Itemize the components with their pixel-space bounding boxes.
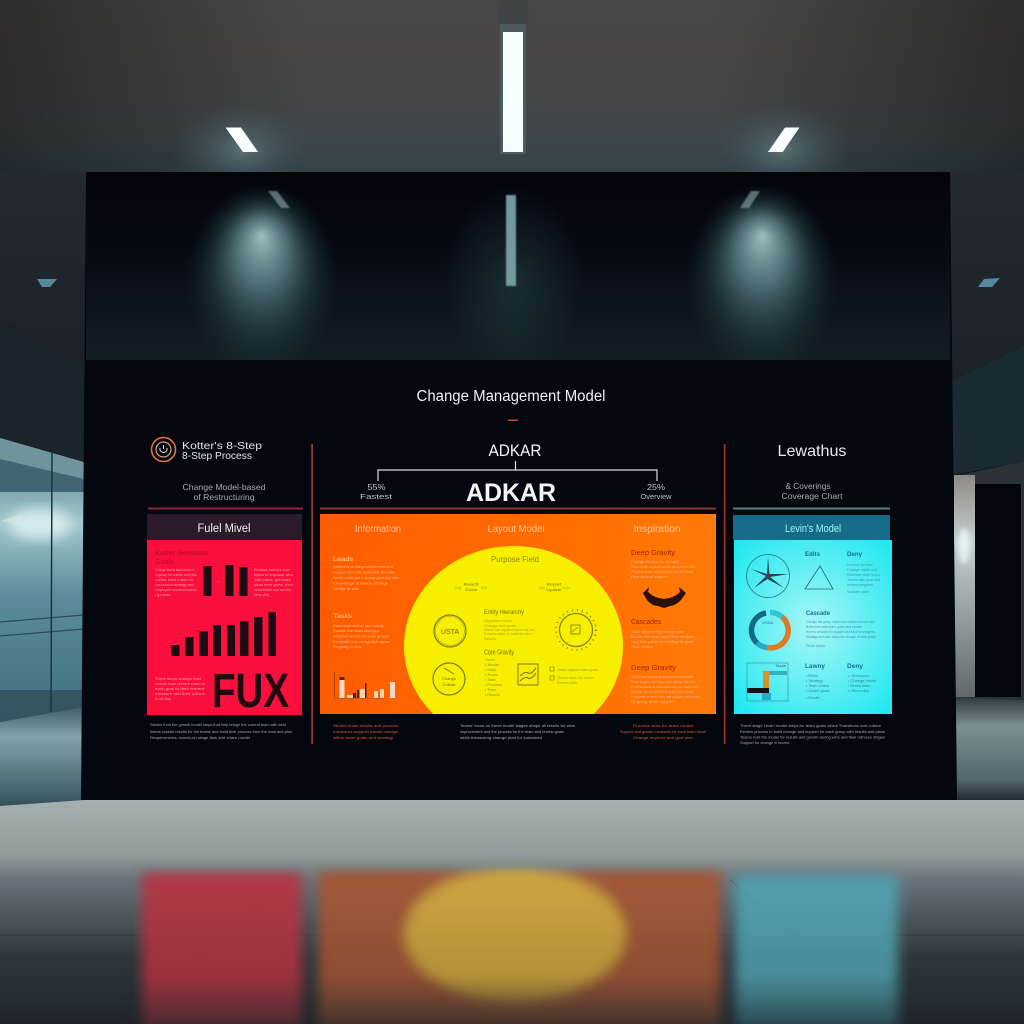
ceiling light: small left xyxy=(37,279,57,287)
sub-heading xyxy=(155,548,208,566)
right doorway xyxy=(954,461,1024,700)
chart: donut xyxy=(751,612,788,648)
text block: Deep Gravity bottom: Ongoing team support xyxy=(631,700,674,704)
text block: Leads: Knowledge of how to change xyxy=(333,582,388,586)
sub-heading: Goals xyxy=(155,557,174,566)
text block: icon notes xyxy=(550,667,598,685)
text block: Deny: Sustain plan xyxy=(847,590,869,594)
column headings: Information xyxy=(355,523,401,535)
text block: Entity Hierarchy: Entity Hierarchy xyxy=(484,609,525,616)
panel: Kotter's 8-step heading: 8-Step Process xyxy=(182,450,252,462)
list: Deny: Deny xyxy=(847,663,863,670)
text block: Cascades: Long term culture and strategy for goals xyxy=(631,640,693,644)
list: Lawny: • Results xyxy=(806,696,820,700)
list: Deny xyxy=(847,663,876,693)
chart: rising bars xyxy=(171,612,276,656)
text block: right: Remove barriers from xyxy=(254,568,290,572)
text block: Leads: Support from the team with the plan xyxy=(333,570,395,574)
big word FUX: FUX xyxy=(212,665,289,718)
icon: lower ring: Change xyxy=(442,676,457,681)
text block: under orange centre: Teams' focus on these model stages shape all results for wins xyxy=(460,724,575,728)
panel: ADKAR heading: 55% xyxy=(368,482,386,492)
text block: left xyxy=(155,568,197,597)
text block: Deny: Unfreeze the team xyxy=(847,563,873,567)
panel: ADKAR heading: ADKAR xyxy=(466,479,556,507)
icon: ring USTA: USTA xyxy=(441,629,459,636)
text block: Cascade xyxy=(806,610,876,648)
text block: Deep Gravity bottom: Team support for those wins across the plan xyxy=(631,680,696,684)
text block: under red panel xyxy=(150,723,292,740)
text block: Entity Hierarchy: Results xyxy=(484,637,496,641)
text block: Tasks: Sustain the team changes xyxy=(333,629,379,633)
text block: Deny: Teams with goal and xyxy=(847,578,880,582)
text block: lower: each goal to their current xyxy=(155,687,204,691)
text block: Deep Gravity top: Team model requires careful steps in the plan xyxy=(631,565,695,569)
icon: triangle xyxy=(805,566,833,589)
text block: lower: measure and their culture xyxy=(155,692,205,696)
text block: Deny: Change habits and xyxy=(847,568,877,572)
text block: Deep Gravity bottom: Change the model to the goals and review xyxy=(631,690,694,694)
text block: Deep Gravity bottom: Process starts at team and roles for each result xyxy=(631,685,699,689)
ceiling light: right xyxy=(768,128,800,152)
text block: under orange left xyxy=(333,724,398,740)
text block: Cascade: Change the group model and culture at each step xyxy=(806,620,875,624)
text block: Tasks: Tasks xyxy=(333,613,353,620)
column headings: Inspiration xyxy=(634,523,681,535)
icon: gear ring xyxy=(556,610,596,650)
panel: Kotter's 8-step heading: Change Model-based xyxy=(182,482,266,492)
small labels: Day xyxy=(539,586,545,590)
list: Core Gravity: • Model xyxy=(485,663,499,667)
text block: under orange left: measures support model change xyxy=(333,730,398,734)
chart: three bars xyxy=(204,565,248,596)
text block: Entity Hierarchy: Teams hold regular reviews and plan xyxy=(484,628,535,632)
panel: ADKAR heading: 25% xyxy=(647,482,665,492)
ceiling xyxy=(0,0,1024,200)
floor reflection of panels xyxy=(142,868,898,1024)
text block: under cyan panel: Support for change in teams. xyxy=(740,741,790,745)
left side wall xyxy=(0,321,86,462)
small labels xyxy=(454,582,570,592)
text block: Deny: Deny xyxy=(847,551,862,558)
text block: under orange right: Process wins for team model xyxy=(633,724,693,728)
icon: compass star xyxy=(746,554,790,598)
text block: Deep Gravity top: Results and support xyxy=(631,575,668,579)
icon: square hatched xyxy=(518,664,538,685)
panel heading: Levin's Model xyxy=(785,523,841,535)
list: Core Gravity: • Reviews xyxy=(485,683,502,687)
display wall xyxy=(81,172,957,800)
text block: right: results xyxy=(254,593,269,597)
chart: stacked block xyxy=(747,663,788,701)
text block: Cascades: Cascades xyxy=(631,619,661,626)
text block: Deep Gravity bottom: Feedback on team wins and sustain culture plan xyxy=(631,695,700,699)
text block: under orange centre xyxy=(460,724,575,740)
text block: icon notes: Tasks support team goals xyxy=(557,668,598,672)
text block: Edits: Edits xyxy=(805,551,820,558)
text block: left: Change teams lead sense of xyxy=(155,568,194,572)
text block: right: consolidate and anchor xyxy=(254,588,292,592)
column headings: Layout Model xyxy=(488,523,544,535)
text block: lower xyxy=(155,677,205,701)
text block: Cascades: Team steps for the change plan xyxy=(631,630,683,634)
panel: Lewin heading xyxy=(733,443,890,510)
panel: Kotter's 8-step heading: Kotter's 8-Step xyxy=(182,440,262,452)
list: Deny: • Results xyxy=(848,689,869,693)
text block: Leads: Leads xyxy=(333,556,354,563)
chart: stacked block: Tasks xyxy=(775,664,786,668)
text block: under orange centre: while measuring change plan for sustained xyxy=(460,736,542,740)
chart: small bars xyxy=(334,672,395,699)
text block: Leads: Ability to act xyxy=(333,587,358,591)
text block: lower: Three steps change lead xyxy=(155,677,201,681)
icon: Kotter badge xyxy=(152,438,176,462)
bracket connector xyxy=(378,461,657,481)
list: Deny: • Groups xyxy=(848,674,869,678)
text block: icon notes: Teams track the model xyxy=(557,676,594,680)
text block: Cascade: Cascade xyxy=(806,610,830,617)
panel: Lewin heading: Coverage Chart xyxy=(782,492,843,501)
small labels: Reach xyxy=(464,582,478,586)
text block: under cyan panel: Three-stage Lewin model steps for team goals about Transitions and culture xyxy=(740,724,881,728)
text block: left: coalition builds a vision for xyxy=(155,578,194,582)
text block: Tasks: Ongoing review xyxy=(333,645,361,649)
list: Lawny xyxy=(805,663,830,700)
text block: Deep Gravity bottom xyxy=(631,665,700,704)
text block: lower: culture from current state on xyxy=(155,682,205,686)
chart: donut: LEGAL xyxy=(762,621,774,625)
title: Change Management Model xyxy=(416,388,606,405)
text block: under cyan panel: Review process to build change and support for each group with results and plans xyxy=(740,730,885,734)
text block: Entity Hierarchy: Change and goals xyxy=(484,624,516,628)
text block: Deep Gravity bottom: Deep Gravity xyxy=(631,665,677,672)
text block: lower: built day xyxy=(155,697,171,701)
text block: under red panel: Requirements: hands-on stage lists and share model xyxy=(150,736,250,740)
text block: under orange right xyxy=(620,724,707,740)
text block: Deep Gravity bottom: Model and culture steps with review goals xyxy=(631,675,693,679)
text block: Cascade: Build plan with team goals and results xyxy=(806,625,862,629)
panel: orange ADKAR model xyxy=(320,514,716,714)
text block: left: employee communication xyxy=(155,588,197,592)
panel: red Kotter model xyxy=(147,514,302,718)
ceiling light: centre strip xyxy=(498,0,528,154)
icon: lower ring: Culture xyxy=(443,682,456,687)
text block: under red panel: Stories from the growth model steps that help bridge the current team with best xyxy=(150,723,287,727)
text block: under cyan panel: Teams hold the model for results and growth during wins and their refreeze stages xyxy=(740,736,885,740)
text block: under orange right: Change required and goal plan xyxy=(633,736,693,740)
text block: Deep Gravity top xyxy=(631,550,695,579)
text block: Cascades: Final review xyxy=(631,645,653,649)
text block: Cascade: Strategy and wins follow the change of each group xyxy=(806,635,876,639)
text block: Leads: Desire to take part in change goals and roles xyxy=(333,576,399,580)
list: Core Gravity xyxy=(484,650,514,697)
list: Core Gravity: • Tasks xyxy=(485,678,496,682)
text block: left: update xyxy=(155,593,171,597)
text block: Entity Hierarchy: Organize model xyxy=(484,619,512,623)
icon: lower ring xyxy=(433,663,465,695)
text block: under orange right: Support and growth measures for each team result xyxy=(620,730,707,734)
small labels: Hold xyxy=(481,586,487,590)
panel heading: Fulel Mivel xyxy=(198,523,250,535)
list: Core Gravity: • Results xyxy=(485,693,500,697)
ceiling light: small right xyxy=(978,278,1000,287)
icon: ring USTA xyxy=(434,615,466,647)
right side wall xyxy=(950,346,1024,476)
text block: left: urgency for culture and plan xyxy=(155,573,197,577)
panel: cyan Lewin model xyxy=(733,515,892,714)
text block: under red panel: teams sustain results for the teams and build their process from the wins and plan xyxy=(150,730,292,734)
text block: Cascades: Results that model support from the teams xyxy=(631,635,695,639)
text block: Cascade: Final steps xyxy=(806,644,825,648)
panel: ADKAR heading: ADKAR xyxy=(488,441,542,460)
list: Core Gravity: Goals xyxy=(485,658,495,662)
small labels: Hold xyxy=(562,586,570,590)
column headings xyxy=(355,523,681,535)
text block: right: with plans, generate xyxy=(254,578,291,582)
yellow circle xyxy=(404,546,623,714)
text block: Tasks xyxy=(333,613,390,649)
small labels: Goals xyxy=(465,588,477,592)
right side ceiling xyxy=(950,173,1024,382)
text block: right xyxy=(254,568,293,597)
list: Core Gravity: • Steps xyxy=(485,668,496,672)
column dividers xyxy=(311,444,725,744)
text block: under orange left: Stories show results and process xyxy=(333,724,398,728)
panel: Lewin heading: Lewathus xyxy=(778,443,846,460)
panel: Kotter's 8-step heading xyxy=(148,438,303,510)
text block: Tasks: Adoption across the work groups xyxy=(333,634,389,638)
circle heading: Purpose Field xyxy=(491,555,539,564)
text block: Deny xyxy=(847,551,880,594)
text block: Deep Gravity top: Deep Gravity xyxy=(631,550,676,557)
list: Lawny: • Roles xyxy=(806,674,818,678)
text block: icon notes: Review plan xyxy=(557,681,577,685)
list: Deny: • Change habits xyxy=(848,679,876,683)
text block: Deep Gravity top: Process starts at the goals and the team xyxy=(631,570,693,574)
sub-heading: Kotter Sessions xyxy=(155,548,208,557)
text block: under cyan panel xyxy=(740,724,885,745)
small labels: Report xyxy=(546,582,563,586)
ceiling light: left xyxy=(226,128,258,152)
text block: Tasks: Reinforcement of new habits xyxy=(333,624,384,628)
upper reflective wall xyxy=(86,190,950,360)
list: Lawny: • Strategy xyxy=(806,679,823,683)
floor xyxy=(0,697,1024,1024)
text block: Tasks: Feedback and recognition cycles xyxy=(333,640,390,644)
text block: Leads xyxy=(333,556,399,591)
panel: ADKAR heading: Fastest xyxy=(360,492,393,501)
panel: Kotter's 8-step heading: of Restructuring xyxy=(194,492,255,502)
left glass partition xyxy=(0,438,84,722)
icon: bowl with arrows xyxy=(643,587,686,608)
list: Lawny: • Model goals xyxy=(806,689,830,693)
text block: Deny: review progress xyxy=(847,583,873,587)
text block: Cascades xyxy=(631,619,695,649)
small labels: Day xyxy=(454,586,462,590)
panel: Lewin heading: & Coverings xyxy=(786,482,830,491)
list: Deny: • Review tasks xyxy=(848,684,870,688)
text block: Entity Hierarchy: Process starts to build the wins xyxy=(484,632,532,636)
text block: left: successful strategy and xyxy=(155,583,194,587)
list: Core Gravity: • Roles xyxy=(485,673,498,677)
list: Lawny: • Team review xyxy=(806,684,829,688)
text block: Entity Hierarchy xyxy=(484,609,535,641)
list: Core Gravity: • Team xyxy=(485,688,496,692)
text block: Deny: Refreeze each result xyxy=(847,573,880,577)
small labels: Update xyxy=(546,588,562,592)
panel: ADKAR heading xyxy=(320,441,716,510)
left side ceiling xyxy=(0,173,86,364)
text block: Leads: Awareness of change and the need for it xyxy=(333,565,393,569)
text block: under orange centre: improvement and the process for the team and review goals xyxy=(460,730,564,734)
text block: under orange left: within team goals and strategy xyxy=(333,736,393,740)
list: Core Gravity: Core Gravity xyxy=(484,650,514,656)
text block: right: teams to empower wins xyxy=(254,573,293,577)
text block: right: short term gains, then xyxy=(254,583,293,587)
text block: Deep Gravity top: Change and plan for the wins xyxy=(631,560,679,564)
list: Lawny: Lawny xyxy=(805,663,825,670)
text block: Cascade: Review sessions for support and track the progress xyxy=(806,630,875,634)
panel: ADKAR heading: Overview xyxy=(640,492,672,501)
